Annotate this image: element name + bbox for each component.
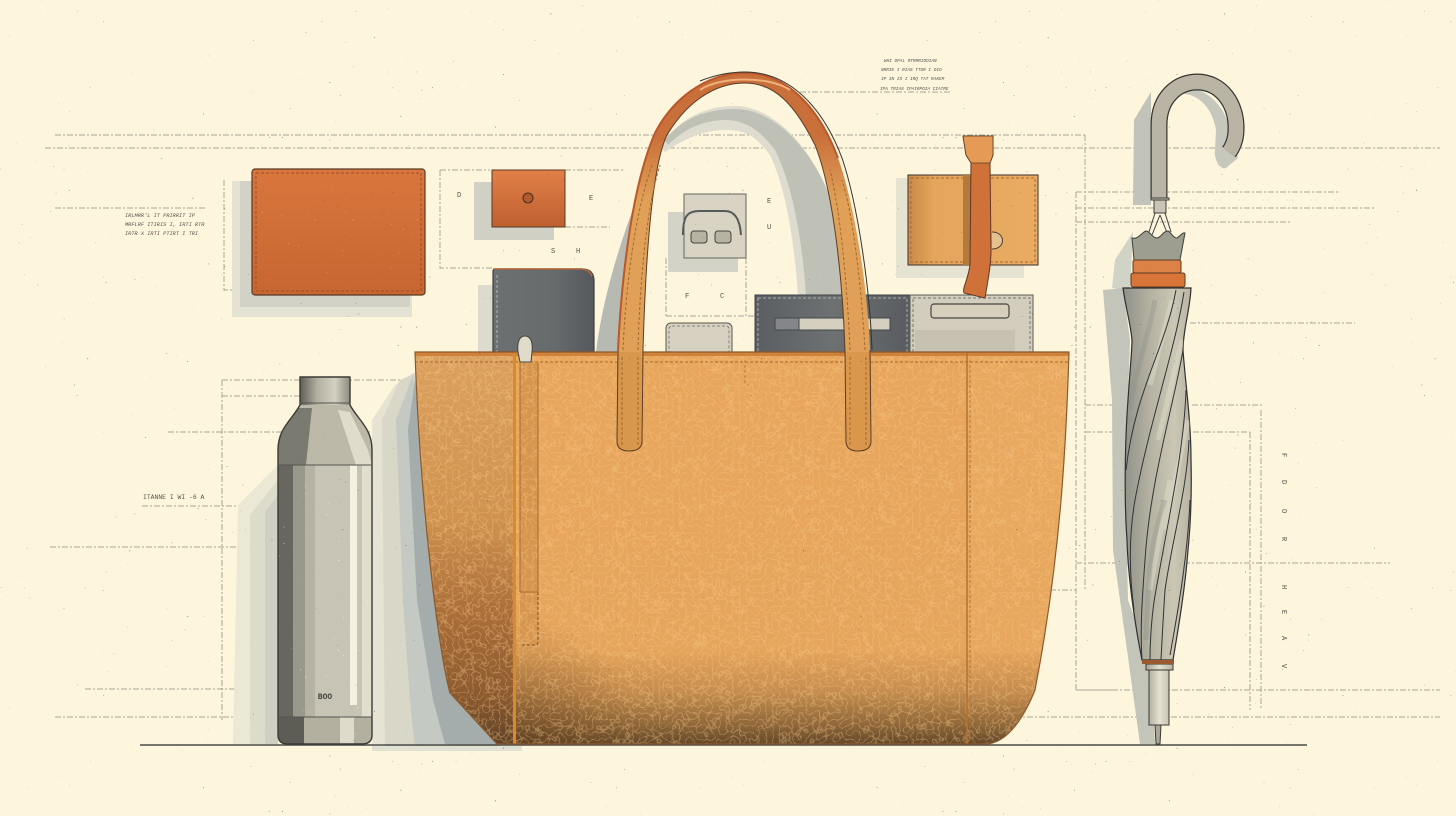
umbrella tip <box>1146 664 1173 725</box>
icon: small leather square with snap <box>492 170 565 227</box>
icon: tan card holder with orange strap <box>908 136 1038 298</box>
zipper pull <box>518 336 532 362</box>
shadows cast on paper <box>232 88 1238 751</box>
umbrella canopy <box>1123 288 1191 660</box>
icon: small light pouch <box>666 323 732 358</box>
umbrella hook handle <box>1159 82 1236 198</box>
blueprint construction lines <box>45 92 1440 720</box>
annotation: vertical letters: V <box>1279 664 1287 669</box>
annotation: letter labels: S <box>551 248 555 256</box>
bag body <box>415 352 1069 744</box>
annotation: vertical letters: H <box>1279 585 1287 589</box>
icon: light grey organiser card <box>910 295 1033 357</box>
annotation: left note: IRTR X IRTI PTIRT I TRI <box>125 231 199 237</box>
annotation: top note <box>880 59 949 92</box>
annotation: letter labels: F <box>685 293 689 301</box>
annotation: vertical letters: E <box>1279 610 1287 614</box>
annotation: top note: NRRIE I RIAS TTOR I DIO <box>881 68 942 73</box>
umbrella orange bands <box>1133 260 1181 273</box>
icon: metal buckle plate <box>683 194 746 258</box>
annotation: vertical letters: O <box>1279 509 1287 513</box>
icon: orange wallet <box>252 169 425 295</box>
annotation: vertical letters: A <box>1279 636 1287 641</box>
icon: grey tablet sleeve <box>493 269 594 352</box>
annotation: vertical letters <box>1279 453 1287 669</box>
annotation: left note <box>125 213 205 237</box>
annotation: top note: IPA TRIAS IPAIRPOIA CIATRE <box>880 87 949 92</box>
annotation: letter labels: U <box>767 224 771 232</box>
icon: water bottle <box>278 377 372 745</box>
annotation: vertical letters: R <box>1279 537 1287 542</box>
ground line <box>140 744 1307 746</box>
annotation: top note: WHI OPAL RTRMRIODIAN <box>884 59 937 64</box>
annotation: letter labels: H <box>576 248 580 256</box>
annotation: top note: IP IN IS I IRQ TAT RAKEM <box>881 77 945 82</box>
annotation: left note: MRFLRF ITIRIS I, IRTI RTR <box>125 222 205 228</box>
icon: bag handle <box>617 72 872 451</box>
icon: umbrella <box>1123 82 1236 744</box>
annotation: vertical letters: D <box>1279 480 1287 484</box>
icon: dark grey organiser card <box>755 295 910 357</box>
umbrella ferrule <box>1149 198 1171 235</box>
bottle logo: BOO <box>318 693 332 702</box>
annotation: letter labels: E <box>589 195 593 203</box>
bag outline <box>415 352 1069 744</box>
icon: tote bag <box>415 336 1069 744</box>
annotation: letter labels: D <box>457 192 461 200</box>
umbrella petals <box>1132 231 1185 260</box>
annotation: vertical letters: F <box>1279 453 1287 457</box>
bag surface shading and texture <box>415 352 1069 744</box>
annotation: letter labels <box>457 192 771 301</box>
annotation: left note: IRLMRR'L IT PRIRRIT IP <box>125 213 196 219</box>
annotation: bottle note: ITANNE I WI -6 A <box>143 494 205 501</box>
annotation: letter labels: C <box>720 293 724 301</box>
annotation: letter labels: E <box>767 198 771 206</box>
